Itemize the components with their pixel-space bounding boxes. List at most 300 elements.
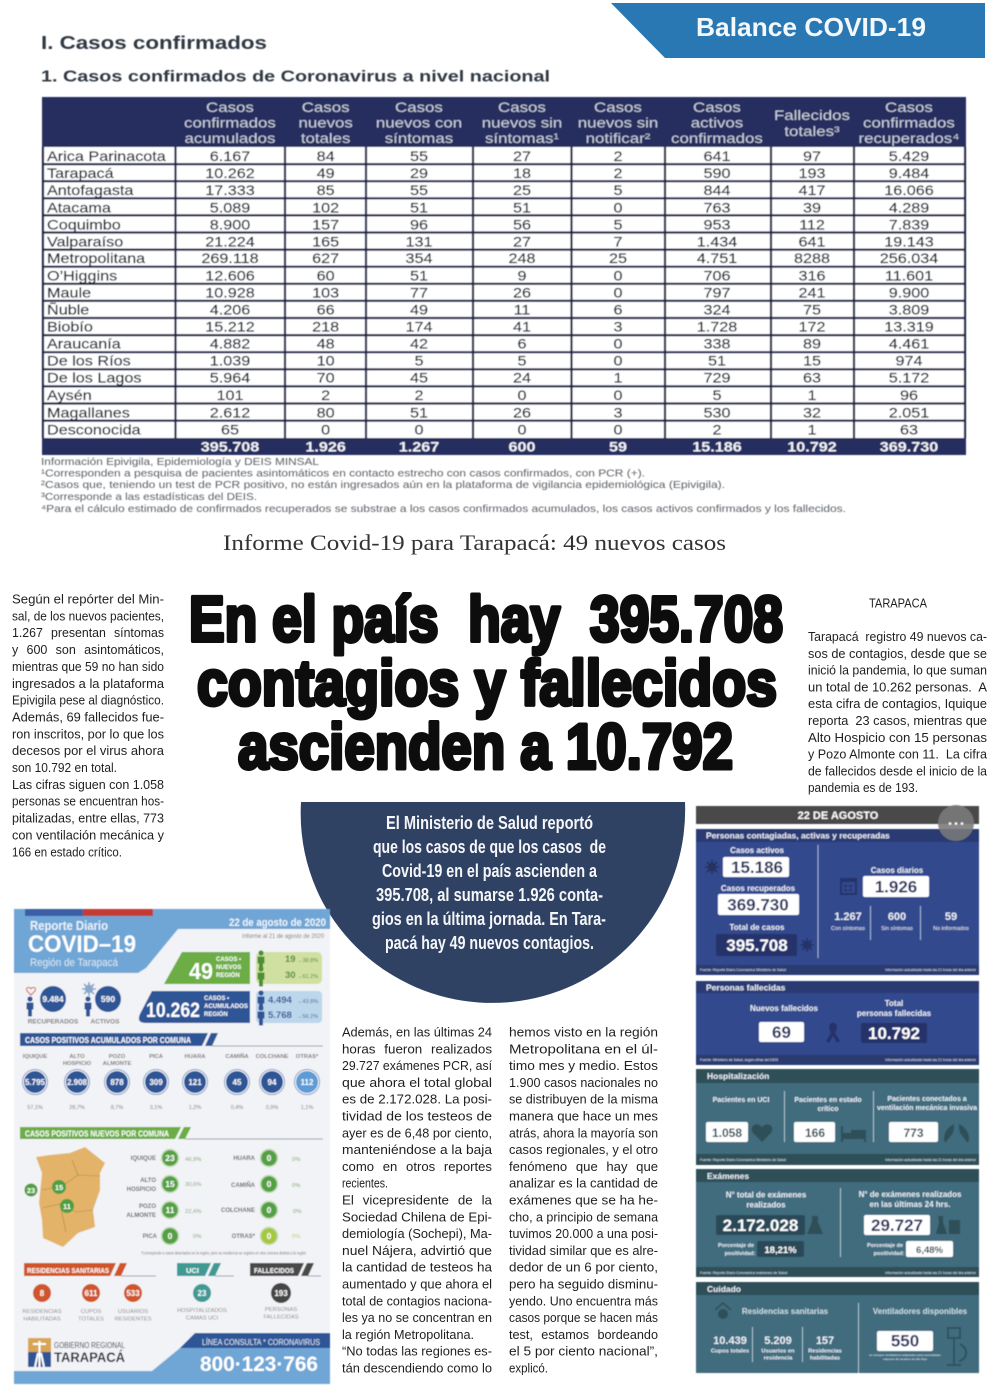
text column: middle 1: total de contagios naciona- [342,1293,492,1308]
row: casos por comuna: 45 [233,1078,242,1087]
table rows: 0 [613,287,623,301]
stats: residencias, UCI, fallecidos: TOTALES [78,1316,104,1322]
table rows: 89 [803,338,821,352]
table rows: 729 [703,372,731,386]
table rows: 10 [317,355,335,369]
panel: cuidado: Ventiladores disponibles [873,1307,968,1316]
table rows: 102 [312,202,339,216]
panel: cuidado: 157 [816,1335,834,1347]
table rows: 5.964 [210,372,250,386]
text column: middle 2: fenómeno que hay que [509,1159,658,1174]
text column: left: mientras que 59 no han sido [12,659,164,674]
stat: activos: 590 [101,994,115,1004]
panel: hospitalización [696,1069,979,1165]
panel: hospitalización: ventilación mecánica invasiva [877,1105,977,1112]
text column: middle 2: el 5 por ciento nacional”, [509,1344,658,1359]
table rows: 25 [609,252,627,267]
headline: En el país hay 395.708 [189,583,783,655]
stat: nuevos casos región: CASOS • [216,957,241,963]
table rows: 103 [312,287,339,301]
text column: left: pitalizadas, entre ellas, 773 [12,811,164,826]
stats: residencias, UCI, fallecidos: FALLECIDAS [263,1314,299,1320]
table rows: 3 [613,407,623,421]
text column: middle 1: les ya no se concentran en [342,1310,492,1325]
panel: personas fallecidas: personas fallecidas [857,1009,932,1018]
table rows: 4.461 [889,338,929,352]
table header: totales³ [784,125,840,140]
section bands: residencias, UCI, fallecidos [24,1263,321,1276]
table rows: 70 [317,372,335,386]
table rows: 256.034 [880,252,938,267]
panel: cuidado: residencia [764,1356,793,1362]
table header: confirmados [863,116,955,131]
panel: exámenes: 18,21% [764,1245,797,1256]
row: casos por comuna: 3,1% [150,1105,162,1111]
table rows: 6.167 [210,150,250,165]
text column: middle 2: hemos visto en la región [509,1024,658,1040]
section bands: residencias, UCI, fallecidos: RESIDENCIAS SANITARIAS [27,1266,109,1275]
section band: nuevos por comuna [20,1127,323,1140]
table rows: 96 [900,389,918,404]
panel: cuidado: se incluyen ventiladores adaptados para necesidades [869,1353,941,1357]
table rows: 55 [410,150,428,165]
text column: Tarapacá: y Pozo Almonte con 11. La cifra [808,747,988,762]
table rows: 29 [410,167,428,182]
table rows: 19.143 [884,236,934,250]
panel: exámenes: realizados [746,1200,786,1210]
table header: nuevos sin [578,116,658,131]
heading: I. Casos confirmados: I. Casos confirmados [41,33,267,53]
footer: línea consulta [14,1333,330,1384]
text column: middle 1: manteniéndose a la baja [342,1142,493,1157]
table rows: 51 [513,202,531,216]
table header: síntomas¹ [485,132,559,147]
table rows: 101 [216,389,244,404]
text column: middle 2: 1.900 casos nacionales no [509,1075,658,1090]
stats: residencias, UCI, fallecidos: 23 [198,1289,207,1298]
stats: residencias, UCI, fallecidos: CAMAS UCI [186,1316,218,1322]
table totals: 1.267 [399,441,439,455]
text column: middle 2: explicó. [509,1360,548,1376]
stat: casos acumulados región: 10.262 [146,999,200,1022]
panel: exámenes: N° de exámenes realizados [859,1190,962,1199]
panel: cuidado: Cuidado [707,1284,741,1294]
stat: activos: ACTIVOS [91,1018,120,1026]
table rows: 417 [798,184,826,199]
callout: dark semicircle: 395.708, al sumarse 1.926 conta- [376,885,603,905]
table rows: 763 [703,202,731,216]
panel: personas contagiadas: 1.267 [834,911,862,923]
panel: personas contagiadas: Total de casos [730,923,785,932]
table rows: 9.484 [889,167,929,182]
table rows: 25 [513,184,531,199]
text column: Tarapacá: un total de 10.262 personas. A [808,679,987,694]
table header: notificar² [586,132,650,147]
table header: Fallecidos [774,109,850,124]
text column: Tarapacá: inició la pandemia, lo que suman [808,663,987,678]
panel: personas contagiadas: 395.708 [726,936,788,955]
table rows: 1.434 [697,236,737,250]
table footnotes [41,456,846,515]
table rows: 56 [513,219,531,233]
stat: nuevos casos región: 30 [285,970,296,981]
row: casos por comuna: COLCHANE [256,1054,289,1060]
table rows: 8288 [794,252,830,267]
table rows: Valparaíso [47,236,123,250]
table rows: 324 [703,304,731,318]
list: nuevos por comuna: 0 [267,1179,272,1189]
banner: Balance COVID-19: Balance COVID-19 [696,12,926,42]
text column: middle 2: timo mes y medio. Estos [509,1058,659,1073]
table rows: 3 [613,321,623,335]
table rows: 4.882 [210,338,250,352]
table rows: 5.429 [889,150,929,165]
panel: personas contagiadas: Información actualizada hasta las 21 horas del día anterior [885,968,977,972]
list: nuevos por comuna: HUARA [233,1156,256,1162]
text column: middle 1: 29.727 exámenes PCR, así [342,1058,492,1073]
section bands: residencias, UCI, fallecidos: UCI [186,1266,199,1275]
stat: nuevos casos región [164,950,322,986]
row: casos por comuna: IQUIQUE [23,1054,47,1060]
table rows: 13.319 [884,321,934,335]
stats: residencias, UCI, fallecidos [22,1283,299,1322]
text column: middle 2: pero ha seguido disminu- [509,1276,658,1292]
heading: Casos confirmados a nivel nacional: 1. Casos confirmados de Coronavirus a nivel nacional [41,68,550,86]
list: nuevos por comuna: COLCHANE [221,1208,255,1214]
table rows: 18 [513,167,531,182]
table rows: 97 [803,150,821,165]
table totals: 59 [609,441,627,455]
table totals: 600 [508,441,536,455]
table header: síntomas [385,132,454,147]
table rows: 85 [317,184,335,199]
table rows: 51 [708,355,726,369]
list: nuevos por comuna: POZO [139,1204,156,1210]
panel: personas contagiadas: 15.186 [731,858,783,877]
table totals: 369.730 [880,441,938,455]
table rows: 2 [321,389,330,404]
text column: Tarapacá: TARAPACA [869,596,927,610]
table rows: 2 [414,389,424,404]
stat: activos [82,982,121,1026]
text column: left: sal, de los nuevos pacientes, [12,608,164,623]
text column: Tarapacá [808,596,988,795]
table rows: 66 [317,304,335,318]
table rows: 51 [410,270,428,284]
row: casos por comuna: HOSPICIO [63,1061,92,1067]
table header: Casos [594,101,642,116]
table rows: 10.262 [205,167,255,182]
table rows: 27 [513,150,531,165]
panel: exámenes: Porcentaje de [718,1243,754,1249]
stat: nuevos casos región: →38.8% [297,958,318,964]
table rows: 80 [317,407,335,421]
table totals: 395.708 [201,441,259,455]
table rows: 55 [410,184,428,199]
table rows: 48 [317,338,335,352]
text column: left: ingresados a la plataforma [12,676,165,691]
panel: cuidado [696,1282,979,1373]
table rows: 17.333 [205,184,255,199]
panel: cuidado: Cupos totales [711,1348,749,1354]
table rows: 51 [410,202,428,216]
header band: Región de Tarapacá [30,957,119,969]
text column: middle 2: Metropolitana en el úl- [509,1041,658,1056]
banner: Balance COVID-19 [611,3,985,58]
text column: middle 2 [509,1024,659,1376]
table rows: 131 [405,236,433,250]
table rows: Magallanes [47,407,130,421]
logo: Gobierno Regional Tarapacá: TARAPACÁ [54,1350,125,1365]
table header: Casos [206,101,254,116]
table rows: 27 [513,236,531,250]
table rows: 60 [317,270,335,284]
text column: middle 1: Además, en las últimas 24 [342,1024,492,1040]
panel: personas contagiadas: No informados [933,926,969,932]
table footnotes: Información Epivigila, Epidemiología y DEIS MINSAL [41,456,319,468]
stat: casos acumulados región: 5.768 [268,1010,292,1021]
table rows: 42 [410,338,428,352]
footer: línea consulta: 800·123·766 [200,1353,318,1376]
stats: residencias, UCI, fallecidos: RESIDENCIAS [22,1309,62,1315]
text column: middle 2: dedor de un 6 por ciento, [509,1260,658,1275]
headline [189,583,783,782]
table rows: 2.051 [889,407,929,421]
table rows: 96 [410,219,428,233]
panel: exámenes: en las últimas 24 hrs. [870,1200,950,1209]
text column: middle 2: atrás, ahora la mayoría son [509,1125,658,1140]
table rows: 0 [613,355,623,369]
text column: Tarapacá: reporta 23 casos, mientras que [808,713,987,728]
list: nuevos por comuna [126,1150,306,1256]
table rows: 241 [798,287,826,301]
logo: Gobierno Regional Tarapacá: GOBIERNO REGIONAL [54,1340,125,1350]
list: nuevos por comuna: 46,9% [185,1157,201,1163]
panel: exámenes: Exámenes [707,1171,749,1181]
stat: casos acumulados región: REGIÓN [204,1010,228,1018]
table rows: Desconocida [47,424,141,438]
text column: left: 166 en estado crítico. [12,844,122,859]
table rows: 5.172 [889,372,929,386]
table rows: 641 [703,150,731,165]
text column: middle 1: tán descendiendo como lo [342,1360,492,1376]
table rows: 2 [613,150,623,165]
text column: Tarapacá: Tarapacá registro 49 nuevos ca- [808,629,987,644]
table rows: 5 [414,355,424,369]
table rows [47,150,938,438]
row: casos por comuna: OTRAS* [296,1054,319,1060]
table totals: 15.186 [692,441,742,455]
list: nuevos por comuna: ALMONTE [126,1213,156,1219]
panel: personas contagiadas: 600 [888,911,906,923]
text column: middle 2: casos porque se hacen más [509,1310,658,1325]
table header [42,97,966,147]
panel: cuidado: habilitadas [810,1356,840,1362]
table rows: 11 [514,304,530,318]
table rows: 39 [803,202,821,216]
header band: Informe al 21 de agosto de 2020 [242,933,324,940]
text column: middle 2: yendo. Uno encuentra más [509,1293,658,1308]
table rows: 248 [508,252,536,267]
text column: Tarapacá: de fallecidos desde el inicio de la [808,763,988,778]
text column: middle 1 [342,1024,493,1376]
table rows: 0 [613,424,623,438]
table rows: 5 [613,219,623,233]
table rows: 4.206 [210,304,250,318]
panel: hospitalización: Pacientes conectados a [887,1096,967,1103]
header band: COVID–19 [28,931,136,958]
table rows: 0 [414,424,424,438]
map: región de Tarapacá: 23 [27,1186,35,1195]
row: casos por comuna: 112 [301,1078,314,1087]
table rows: 157 [312,219,339,233]
text column: middle 1: recientes. [342,1176,388,1191]
table totals [42,438,966,455]
section band: acumulados por comuna: CASOS POSITIVOS ACUMULADOS POR COMUNA [25,1036,191,1045]
table rows: 354 [405,252,433,267]
panel: exámenes: 29.727 [871,1216,923,1235]
table rows: 1.728 [697,321,737,335]
table rows: 10.928 [205,287,255,301]
table rows: 218 [312,321,339,335]
text column: left [12,592,165,859]
table rows: Maule [47,287,91,301]
text column: middle 1: ayer es de 6,48 por ciento, [342,1125,492,1140]
text column: left: decesos por el virus ahora [12,743,165,758]
table rows: 9 [517,270,527,284]
text column: middle 1: como en otros reportes [342,1159,492,1174]
stat: nuevos casos región: NUEVOS [216,965,241,971]
table header: nuevos con [376,116,462,131]
panel: hospitalización: Pacientes en estado [794,1097,862,1104]
stat: casos acumulados región: →56.2% [297,1014,318,1020]
text column: middle 2: casos regionales, y el otro [509,1142,658,1157]
list: nuevos por comuna: OTRAS* [232,1234,256,1240]
text column: middle 2: exámenes que se ha he- [509,1192,658,1208]
table rows: 26 [513,287,531,301]
panel: personas contagiadas: Con síntomas [831,926,865,932]
date bar: 22 DE AGOSTO [798,810,879,822]
table rows: 3.809 [889,304,929,318]
table rows: 63 [803,372,821,386]
table header: Casos [302,101,350,116]
table rows: 4.289 [889,202,929,216]
row: casos por comuna: 5.795 [25,1078,46,1087]
table footnotes: ⁴Para el cálculo estimado de confirmados recuperados se substrae a los casos confirmados acumulados, los casos activos confirmados y los fallecidos. [41,503,846,515]
panel: exámenes: 2.172.028 [723,1216,798,1235]
panel: exámenes: positividad: [725,1251,756,1257]
panel: personas fallecidas: Fuente: Ministerio de Salud, según cifras del DEIS [700,1058,779,1062]
panel: cuidado: mayores de usuarios de alto flujo [883,1357,927,1361]
table rows: 1 [807,424,817,438]
row: casos por comuna: CAMIÑA [225,1053,249,1060]
table rows: Coquimbo [47,219,121,233]
list: nuevos por comuna: 0% [292,1157,300,1163]
table header: Casos [885,101,933,116]
table rows: 15.212 [205,321,255,335]
section band: nuevos por comuna: CASOS POSITIVOS NUEVOS POR COMUNA [25,1130,169,1138]
table header: confirmados [671,132,763,147]
row: casos por comuna: HUARA [185,1054,206,1060]
stat: recuperados: RECUPERADOS [28,1018,79,1026]
row: casos por comuna: 28,7% [69,1105,85,1111]
table rows: 1 [807,389,817,404]
text column: middle 2: tividad similar que es alre- [509,1243,658,1258]
list: nuevos por comuna: IQUIQUE [131,1156,156,1162]
stat: casos acumulados región [139,990,322,1026]
table rows: 12.606 [205,270,255,284]
table rows: 172 [798,321,826,335]
row: casos por comuna: 0,4% [231,1105,243,1111]
table rows: 49 [317,167,335,182]
panel: cuidado: 10.439 [713,1335,747,1347]
text column: middle 2: tuvimos 20.000 a una posi- [509,1226,658,1241]
table rows: 2 [712,424,722,438]
section bands: residencias, UCI, fallecidos: FALLECIDOS [254,1266,294,1275]
table rows: 24 [513,372,531,386]
headline: ascienden a 10.792 [238,710,733,782]
table rows: 15 [803,355,821,369]
table rows: 1 [613,372,623,386]
table rows: 11.601 [885,270,933,284]
list: nuevos por comuna: 0% [292,1183,300,1189]
list: nuevos por comuna: 22,4% [185,1209,201,1215]
panel: personas contagiadas: 59 [945,911,957,923]
panel: personas contagiadas: 1.926 [875,878,917,896]
panel: exámenes: positividad: [874,1251,905,1257]
table rows: 797 [703,287,731,301]
callout: dark semicircle: El Ministerio de Salud reportó [386,813,593,833]
table rows: 0 [613,389,623,404]
table rows: Atacama [47,202,112,216]
panel: hospitalización: Información actualizada hasta las 21 horas del día anterior [885,1158,977,1162]
row: casos por comuna: 309 [149,1078,163,1087]
callout: dark semicircle [301,802,685,1003]
list: nuevos por comuna: 0% [293,1209,301,1215]
text column: left: Además, 69 fallecidos fue- [12,710,164,724]
table rows: 5 [517,355,527,369]
table rows: 5 [613,184,623,199]
panel: cuidado: Residencias sanitarias [742,1307,829,1316]
text column: Tarapacá: esta cifra de contagios, Iquique [808,696,987,711]
icon: menu dots [938,805,974,841]
list: nuevos por comuna: 30,6% [185,1182,201,1188]
panel: exámenes: Porcentaje de [867,1243,903,1249]
panel: cuidado: Usuarios en [761,1348,795,1354]
table rows: 2 [613,167,623,182]
row: casos por comuna: 121 [188,1078,202,1087]
callout: dark semicircle: gios en la última jornada. En Tara- [372,909,606,929]
table rows: Ñuble [47,303,89,318]
row: casos por comuna: 2.908 [67,1078,88,1087]
logo: Gobierno Regional Tarapacá [28,1338,125,1367]
panel: hospitalización: 166 [805,1126,825,1140]
table rows: 174 [405,321,433,335]
table totals: 10.792 [787,441,837,455]
callout: dark semicircle: Covid-19 en el país ascienden a [382,861,598,881]
stat: casos acumulados región: →43.8% [297,999,318,1005]
date bar [696,806,979,824]
text column: left: Según el repórter del Min- [12,592,164,606]
panel: exámenes: Fuente: Reporte Diario Coronavirus exámenes de Salud [700,1271,787,1275]
list: nuevos por comuna: 0 [267,1153,272,1163]
row: casos por comuna [22,1053,320,1111]
panel: exámenes: 6,48% [916,1245,944,1256]
text column: middle 1: la cantidad de testeos ha [342,1260,493,1275]
panel: personas contagiadas: Casos diarios [871,866,924,875]
panel: personas fallecidas [696,981,979,1065]
panel: personas fallecidas: 69 [772,1023,791,1042]
